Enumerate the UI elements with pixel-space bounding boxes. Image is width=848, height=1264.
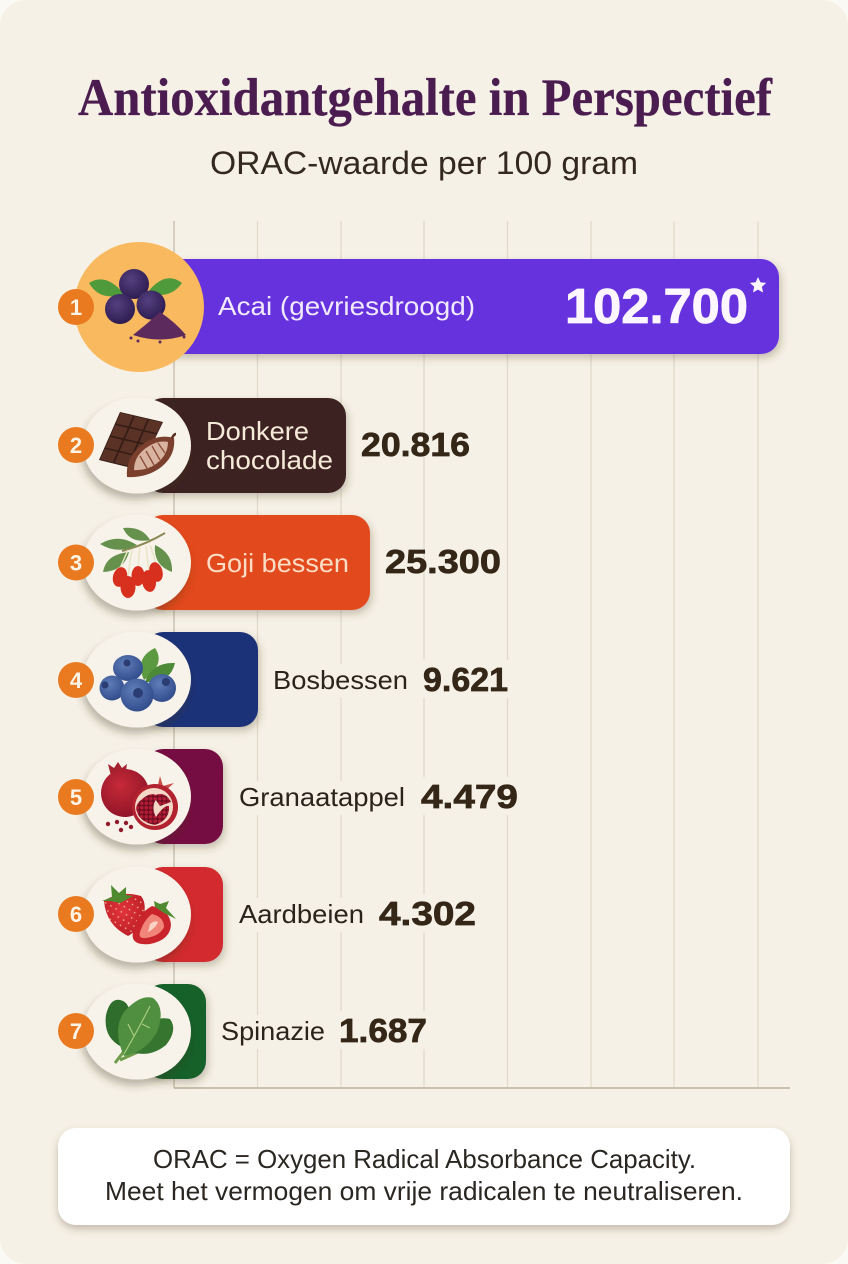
bar: goji (145, 515, 370, 610)
label halo and text: bosbessen: Bosbessen (273, 665, 408, 695)
bar: chocolade (145, 398, 346, 493)
badge 5: 5 (70, 785, 82, 810)
label halo and text: spinazie: Spinazie (221, 1016, 325, 1046)
bar: aardbeien (145, 867, 223, 962)
badge 7: 7 (70, 1019, 82, 1044)
icon blob: chocolade (83, 398, 191, 494)
label: chocolade: Donkere (206, 416, 309, 446)
bar: bosbessen (145, 632, 258, 727)
badge 1 (58, 289, 94, 325)
value: spinazie: 1.687 (339, 1012, 427, 1049)
badge 3 (58, 544, 94, 580)
value: goji: 25.300 (385, 543, 501, 580)
row 3: Goji bessen (58, 514, 501, 610)
label: goji: Goji bessen (206, 548, 349, 578)
value: chocolade: 20.816 (361, 426, 470, 463)
value: bosbessen: 9.621 (423, 661, 508, 698)
chart gridlines and axis (174, 221, 790, 1088)
bar: Acai (145, 259, 779, 354)
badge 2 (58, 427, 94, 463)
badge 4: 4 (70, 668, 83, 693)
badge 4 (58, 662, 94, 698)
label: chocolade (206, 416, 333, 475)
footer note: Meet het vermogen om vrije radicalen te neutraliseren. (105, 1176, 743, 1206)
footer note (58, 1128, 790, 1225)
icon blob: bosbessen (83, 632, 191, 728)
badge 6 (58, 896, 94, 932)
badge 2: 2 (70, 433, 82, 458)
icon blob: goji (83, 514, 191, 610)
icon blob: granaatappel (83, 748, 191, 844)
badge 3: 3 (70, 550, 82, 576)
icon blob: spinazie (83, 984, 191, 1080)
row 5: Granaatappel (58, 748, 524, 844)
value: aardbeien: 4.302 (379, 895, 476, 932)
value: granaatappel: 4.479 (421, 778, 518, 815)
bar: granaatappel (145, 749, 223, 844)
row 2: Donkere chocolade (58, 398, 470, 494)
row 4: Bosbessen (58, 632, 514, 728)
row 1: Acai (58, 242, 779, 372)
label halo and text: granaatappel: Granaatappel (239, 782, 405, 812)
badge 6: 6 (70, 902, 82, 927)
label: chocolade: chocolade (206, 445, 333, 475)
footer note: ORAC = Oxygen Radical Absorbance Capacity. (153, 1144, 696, 1174)
label halo and text: aardbeien: Aardbeien (239, 899, 364, 929)
badge 1: 1 (70, 295, 82, 320)
subtitle: ORAC-waarde per 100 gram (210, 145, 638, 181)
title: Antioxidantgehalte in Perspectief (78, 69, 773, 127)
icon: star (750, 277, 766, 292)
value: Acai: 102.700 (565, 280, 748, 334)
badge 7 (58, 1013, 94, 1049)
row 7: Spinazie (58, 984, 432, 1080)
bar: spinazie (145, 984, 206, 1079)
row 6: Aardbeien (58, 866, 482, 962)
badge 5 (58, 779, 94, 815)
icon blob: aardbeien (83, 866, 191, 962)
label: Acai: Acai (gevriesdroogd) (218, 291, 475, 321)
icon circle: Acai (74, 242, 204, 372)
